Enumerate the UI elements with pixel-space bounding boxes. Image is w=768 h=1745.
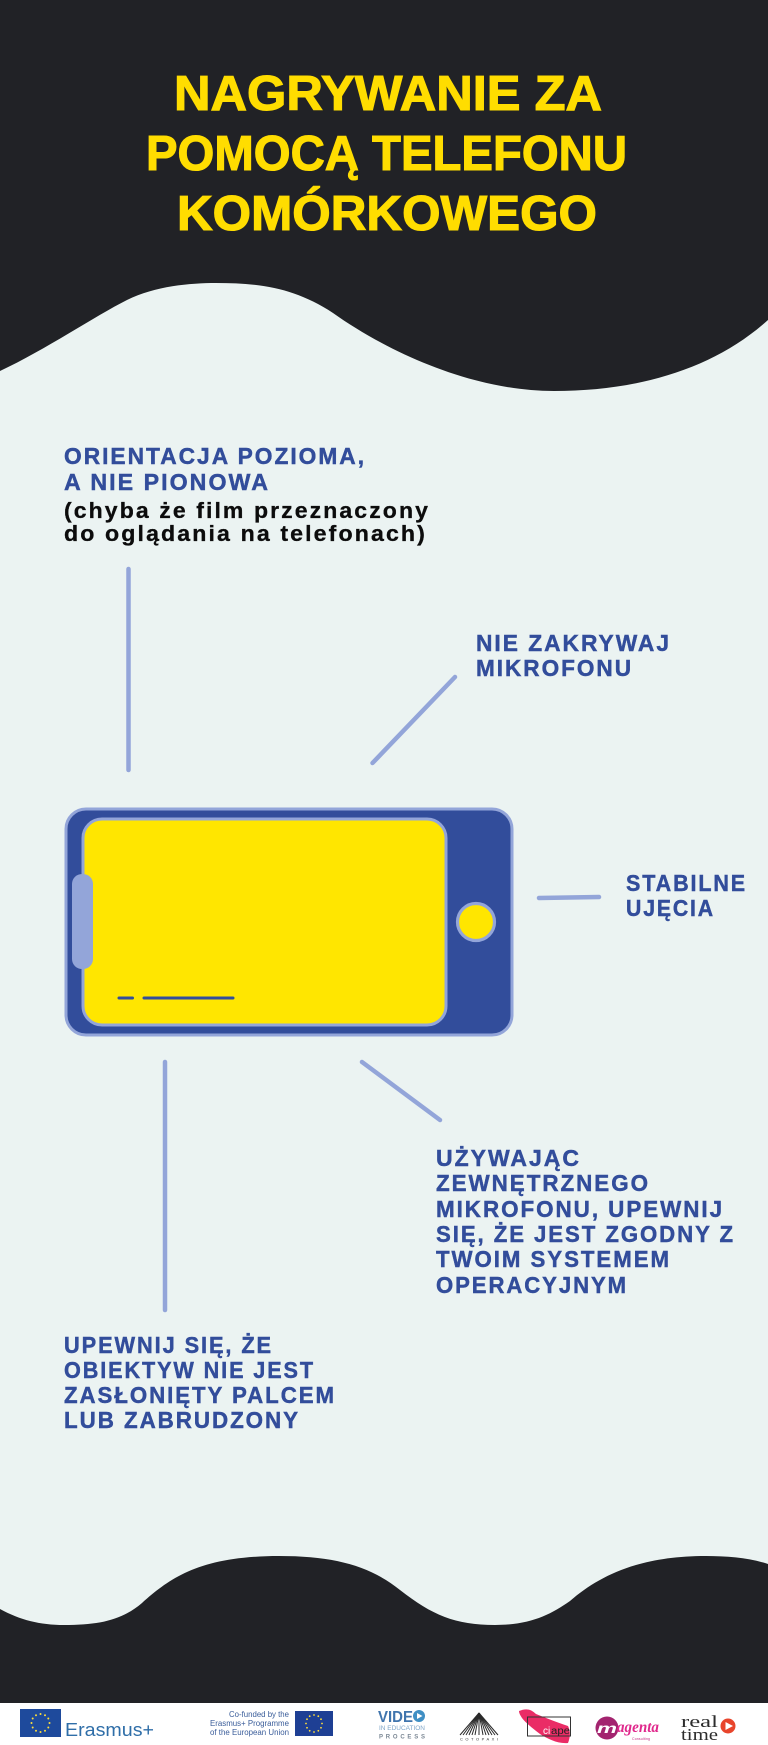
text: do not cover microphone — [476, 630, 671, 681]
logo: Real Time: real — [681, 1712, 718, 1731]
logo: Ciape: ci — [543, 1726, 550, 1737]
text: external microphone tip: MIKROFONU, UPEWNIJ — [436, 1196, 724, 1222]
phone screen — [83, 819, 446, 1025]
screen dash — [119, 996, 132, 1000]
title — [146, 67, 627, 241]
text: landscape orientation tip — [64, 443, 430, 546]
arrow line: stable shots — [539, 897, 599, 898]
logo: Video in Education Process: VIDE — [378, 1709, 413, 1726]
logo: co-funded by the EU: Co-funded by the — [229, 1710, 290, 1719]
phone body — [66, 809, 512, 1035]
text: external microphone tip: UŻYWAJĄC — [436, 1145, 581, 1171]
text: external microphone tip: SIĘ, ŻE JEST ZGODNY Z — [436, 1221, 735, 1247]
logo: co-funded by the EU — [210, 1710, 333, 1737]
logo: Magenta: agenta — [617, 1719, 659, 1736]
text: do not cover microphone: NIE ZAKRYWAJ — [476, 630, 671, 656]
text: landscape orientation tip: do oglądania na telefonach) — [64, 521, 427, 546]
text: do not cover microphone: MIKROFONU — [476, 655, 633, 681]
header wave panel — [0, 0, 768, 391]
text: stable shots: UJĘCIA — [626, 895, 715, 921]
icon: phone in landscape orientation — [66, 809, 512, 1035]
text: clean lens tip: OBIEKTYW NIE JEST — [64, 1357, 315, 1383]
title: NAGRYWANIE ZA — [174, 67, 602, 121]
footer wave panel — [0, 1556, 768, 1703]
logo: Ciape: ape — [551, 1726, 570, 1737]
arrow line: orientation — [126, 569, 131, 770]
logo: Video in Education Process: IN EDUCATION — [379, 1725, 425, 1732]
logo: co-funded by the EU: of the European Union — [210, 1728, 289, 1737]
logo: Video in Education Process — [378, 1709, 425, 1740]
text: clean lens tip — [64, 1332, 336, 1433]
text: landscape orientation tip: (chyba że film przeznaczony — [64, 498, 430, 523]
text: landscape orientation tip: ORIENTACJA POZIOMA, — [64, 443, 366, 469]
text: landscape orientation tip: A NIE PIONOWA — [64, 469, 270, 495]
text: clean lens tip: LUB ZABRUDZONY — [64, 1407, 300, 1433]
text: stable shots — [626, 870, 747, 921]
text: external microphone tip: ZEWNĘTRZNEGO — [436, 1170, 650, 1196]
logo: Magenta: Consulting — [632, 1737, 650, 1741]
logo: Magenta: m — [597, 1720, 617, 1736]
text: clean lens tip: ZASŁONIĘTY PALCEM — [64, 1382, 336, 1408]
logo: Cotopaxi: COTOPAXI — [460, 1736, 498, 1742]
title: POMOCĄ TELEFONU — [146, 127, 627, 181]
text: clean lens tip: UPEWNIJ SIĘ, ŻE — [64, 1332, 273, 1358]
logo: Video in Education Process: PROCESS — [379, 1734, 425, 1740]
logo: Real Time — [681, 1712, 736, 1744]
logo: Erasmus+ — [20, 1709, 154, 1740]
logo: Magenta — [596, 1716, 659, 1741]
screen bar — [144, 996, 233, 1000]
arrow line: lens — [163, 1062, 167, 1310]
arrow line: microphone — [372, 677, 455, 763]
logo: co-funded by the EU: Erasmus+ Programme — [210, 1719, 290, 1728]
logo: Erasmus+: Erasmus+ — [65, 1720, 154, 1740]
title: KOMÓRKOWEGO — [177, 186, 597, 241]
logo: Ciape — [519, 1709, 570, 1743]
logo: Cotopaxi — [460, 1713, 498, 1742]
text: external microphone tip — [436, 1145, 735, 1298]
text: external microphone tip: TWOIM SYSTEMEM — [436, 1246, 671, 1272]
phone notch — [72, 874, 93, 969]
arrow line: external microphone — [362, 1062, 440, 1120]
logo strip — [0, 1703, 768, 1745]
text: stable shots: STABILNE — [626, 870, 747, 896]
home button — [458, 904, 494, 940]
logo: Real Time: time — [681, 1725, 718, 1744]
text: external microphone tip: OPERACYJNYM — [436, 1272, 628, 1298]
